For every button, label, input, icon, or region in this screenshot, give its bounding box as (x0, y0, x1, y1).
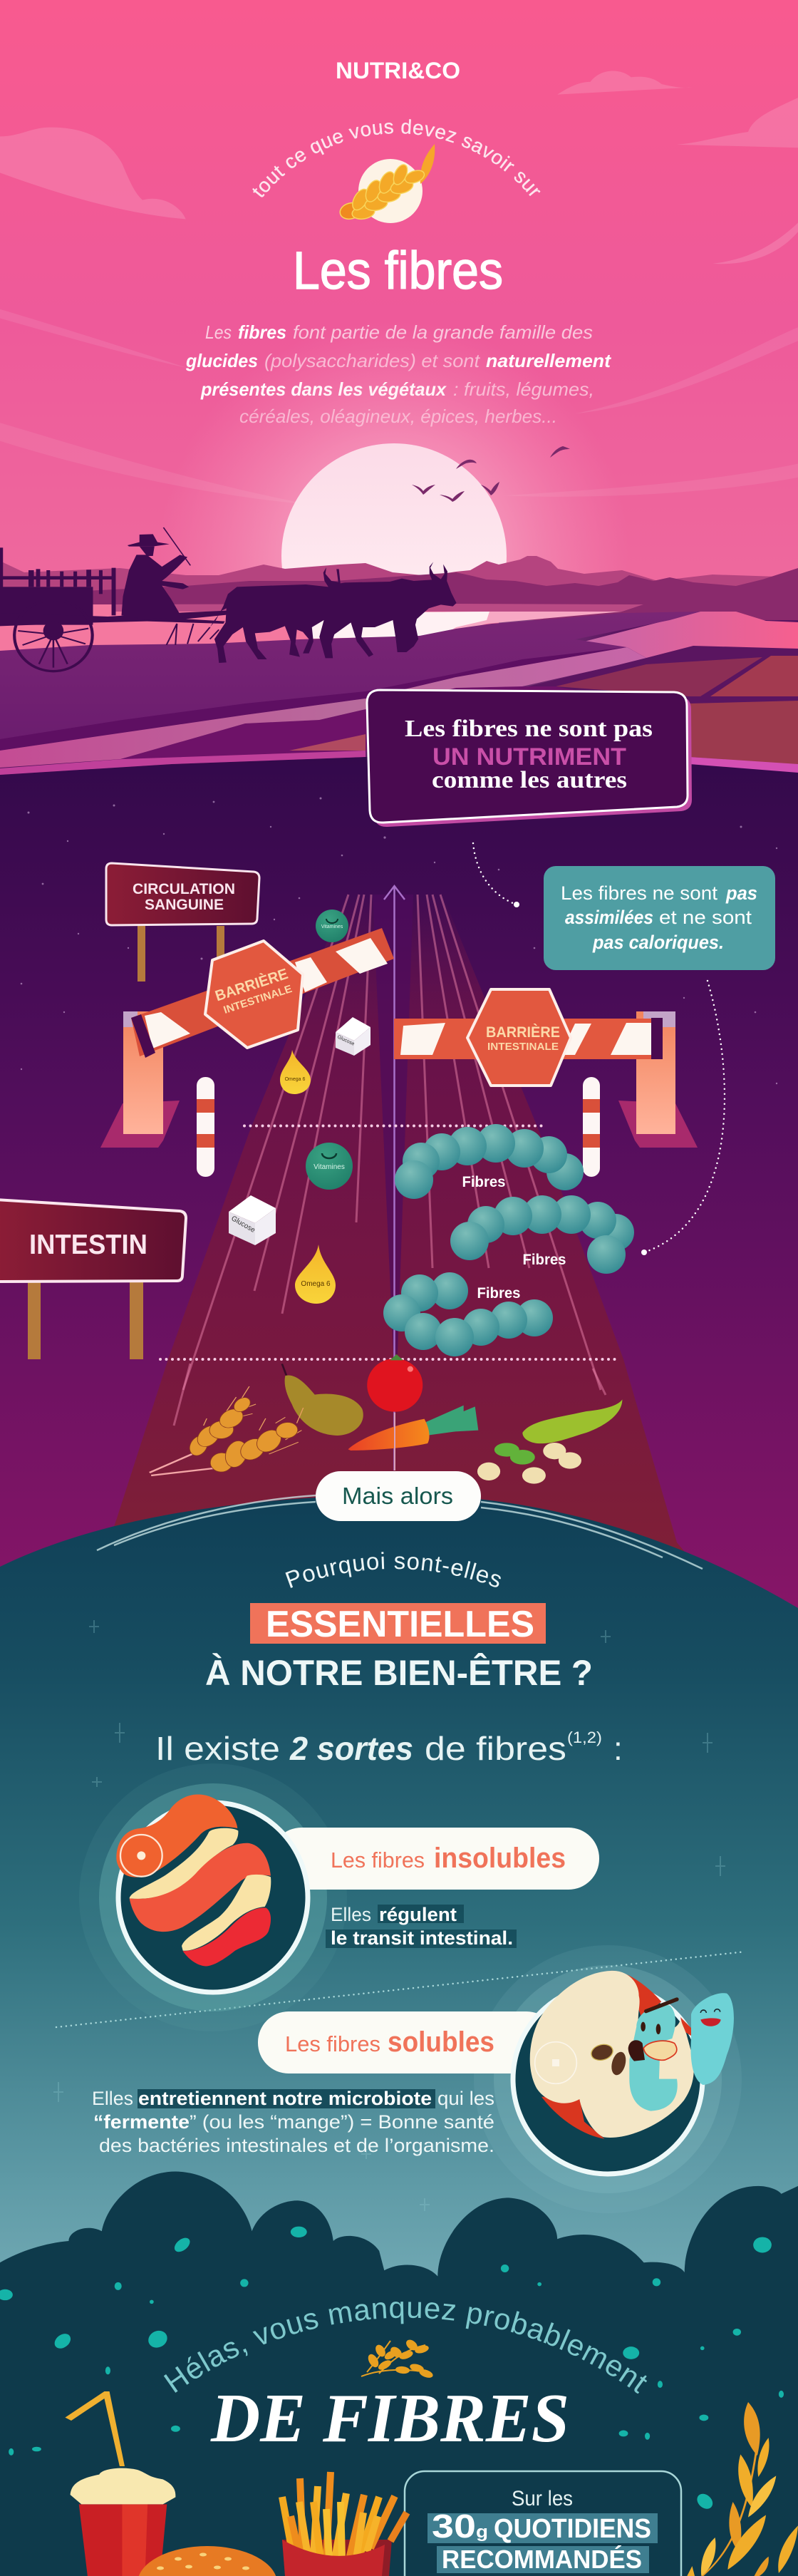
sign: intestin: INTESTIN (29, 1230, 147, 1260)
curved heading: pourquoi: Pourquoi sont-elles (285, 1552, 501, 1588)
callout: not assimilated: et ne sont (659, 907, 752, 928)
intro text (185, 321, 611, 427)
carrot (348, 1406, 478, 1451)
stop sign left: BARRIÈRE (213, 966, 290, 1004)
glucose cube small (336, 1017, 370, 1056)
raised barrier (131, 928, 394, 1058)
heading: 2 sortes de fibres (155, 1729, 623, 1767)
curved intro heading: tout ce que vous devez savoir sur (252, 119, 540, 197)
fibre chain 1: Fibres (462, 1174, 506, 1190)
sign: circulation sanguine: SANGUINE (145, 897, 224, 913)
sign: circulation sanguine (106, 863, 259, 982)
closed barrier (394, 1018, 663, 1059)
illustration: cart, farmer and oxen (0, 527, 457, 671)
bollards (197, 1077, 600, 1177)
omega drop small: Omega 6 (285, 1077, 306, 1082)
heading: essentielles: ESSENTIELLES (266, 1604, 534, 1645)
intro text: (polysaccharides) et sont (264, 350, 481, 371)
callout: not assimilated: pas caloriques. (592, 932, 724, 953)
dots at connector ends (514, 902, 647, 1255)
right gate post (618, 1011, 698, 1148)
panel: teal section background (0, 1495, 798, 2352)
birds (412, 446, 570, 502)
road (100, 895, 698, 1568)
logo: NUTRI&CO (336, 58, 460, 83)
heading: 2 sortes de fibres: Il existe (155, 1730, 280, 1767)
stop sign left (205, 941, 303, 1048)
barrier level dotted line (244, 1125, 544, 1128)
icon: apple half with bacteria (530, 1971, 734, 2139)
lower axis line segment (394, 1413, 395, 1470)
stop sign left: INTESTINALE (222, 983, 294, 1016)
icon: wheat stalk right (687, 2402, 798, 2576)
pill: insolubles (271, 1828, 599, 1890)
box: 30g recommended: 30 (432, 2508, 476, 2545)
text: solubles: entretiennent notre microbiote (138, 2088, 432, 2109)
glucose cube big (229, 1195, 276, 1245)
text: solubles: qui les (437, 2088, 494, 2109)
callout: not a nutrient: Les fibres ne sont pas (405, 716, 653, 742)
vitamin small: Vitamines (321, 924, 343, 929)
left gate post (100, 1011, 180, 1148)
curved heading: helas: Hélas, vous manquez probablement (164, 2302, 647, 2394)
diagonal dotted divider (56, 1952, 745, 2027)
heading: bien-etre: À NOTRE BIEN-ÊTRE ? (205, 1653, 593, 1693)
pill: mais alors: Mais alors (342, 1483, 453, 1509)
pill: solubles (258, 2011, 557, 2073)
oxen (210, 562, 457, 663)
heading: de fibres: DE FIBRES (210, 2380, 569, 2457)
box: 30g recommended: g (476, 2523, 488, 2542)
intro text: : fruits, légumes, (453, 378, 594, 400)
flecks (0, 2227, 784, 2511)
pill: mais alors (316, 1471, 481, 1521)
text: solubles: des bactéries intestinales et de l’organisme. (99, 2135, 494, 2156)
title: Les fibres (293, 241, 503, 300)
clouds and wisps (0, 71, 798, 505)
icon: soda cup (65, 2391, 175, 2576)
omega drop big: Omega 6 (301, 1280, 331, 1288)
heading: 2 sortes de fibres: 2 sortes (289, 1730, 413, 1767)
panel: sunset sky (0, 0, 798, 784)
intro text: font partie de la grande famille des (293, 321, 593, 343)
text: insolubles (326, 1904, 517, 1949)
tomato (367, 1354, 423, 1412)
stop sign right: BARRIÈRE (486, 1024, 560, 1041)
intro text: Les (205, 321, 232, 343)
glucose cube small: Glucose (336, 1034, 355, 1047)
background: starry night road section (0, 751, 798, 1639)
vitamin small (316, 910, 348, 942)
box: 30g recommended (405, 2471, 681, 2576)
intestine level dotted line (160, 1358, 621, 1361)
box: 30g recommended: QUOTIDIENS (494, 2514, 651, 2544)
cart (0, 547, 228, 671)
callout: not assimilated: pas (725, 882, 757, 904)
pea pod and beans (477, 1399, 622, 1484)
mountains (0, 556, 798, 620)
text: solubles: Elles (92, 2088, 133, 2109)
fibre chain 1 (395, 1124, 584, 1199)
callout: not a nutrient (367, 690, 692, 827)
pill: solubles: Les fibres (285, 2031, 380, 2056)
callout: not a nutrient: UN NUTRIMENT (432, 743, 626, 771)
icon: fries (282, 2472, 407, 2576)
callout: not assimilated (544, 866, 775, 970)
text: solubles: “fermente (93, 2111, 190, 2133)
callout: not a nutrient: comme les autres (432, 767, 627, 793)
foods (150, 1354, 622, 1484)
sign: intestin (0, 1200, 186, 1359)
pill: solubles: solubles (388, 2026, 494, 2058)
intro text: naturellement (486, 350, 611, 371)
callout: not assimilated: Les fibres ne sont (561, 882, 717, 904)
fibre chain 2: Fibres (523, 1252, 566, 1268)
omega drop big (295, 1245, 336, 1304)
wheat ears (150, 1386, 304, 1475)
fibre chain 2 (450, 1195, 634, 1274)
omega drop small (280, 1050, 311, 1094)
intro text: présentes dans les végétaux (200, 378, 447, 400)
ground and fields (0, 612, 798, 768)
farmer (121, 527, 190, 619)
icon: small wheat (361, 2339, 433, 2379)
glucose cube big: Glucose (229, 1215, 256, 1235)
vitamin big (306, 1143, 353, 1190)
text: insolubles: régulent (379, 1904, 457, 1925)
sun (159, 321, 629, 791)
text: solubles (92, 2088, 494, 2156)
water (0, 604, 798, 659)
stop sign right (467, 989, 571, 1086)
text: solubles: ” (ou les “mange”) = Bonne santé (190, 2111, 494, 2133)
icon: wheat on egg (338, 144, 435, 223)
intro text: glucides (185, 350, 258, 371)
heading: 2 sortes de fibres: : (613, 1730, 623, 1767)
stop sign right: INTESTINALE (487, 1041, 559, 1053)
sign: circulation sanguine: CIRCULATION (133, 881, 235, 897)
panel: insoluble fibres (79, 1763, 599, 2031)
dotted connector (473, 843, 725, 1252)
fibre chain 3 (383, 1272, 553, 1356)
fibre chain 3: Fibres (477, 1285, 520, 1302)
icon: burger (138, 2546, 277, 2576)
vitamin big: Vitamines (314, 1163, 345, 1171)
arrow: central axis (384, 886, 405, 1470)
icon: apple peel (116, 1794, 271, 1966)
text: insolubles: le transit intestinal. (331, 1927, 513, 1949)
callout: not assimilated: assimilées (565, 907, 653, 928)
intro text: fibres (238, 321, 286, 343)
panel: dark forest (0, 2171, 798, 2576)
intro text: céréales, oléagineux, épices, herbes... (239, 406, 557, 427)
heading: 2 sortes de fibres: de fibres (425, 1730, 566, 1767)
text: insolubles: Elles (331, 1904, 371, 1925)
box: 30g recommended: Sur les (512, 2487, 573, 2510)
heading: 2 sortes de fibres: (1,2) (567, 1729, 602, 1746)
box: 30g recommended: RECOMMANDÉS (442, 2545, 642, 2574)
pill: insolubles: Les fibres (331, 1848, 425, 1872)
pear (282, 1364, 363, 1436)
pill: insolubles: insolubles (434, 1843, 566, 1874)
panel: soluble fibres (92, 1945, 742, 2213)
